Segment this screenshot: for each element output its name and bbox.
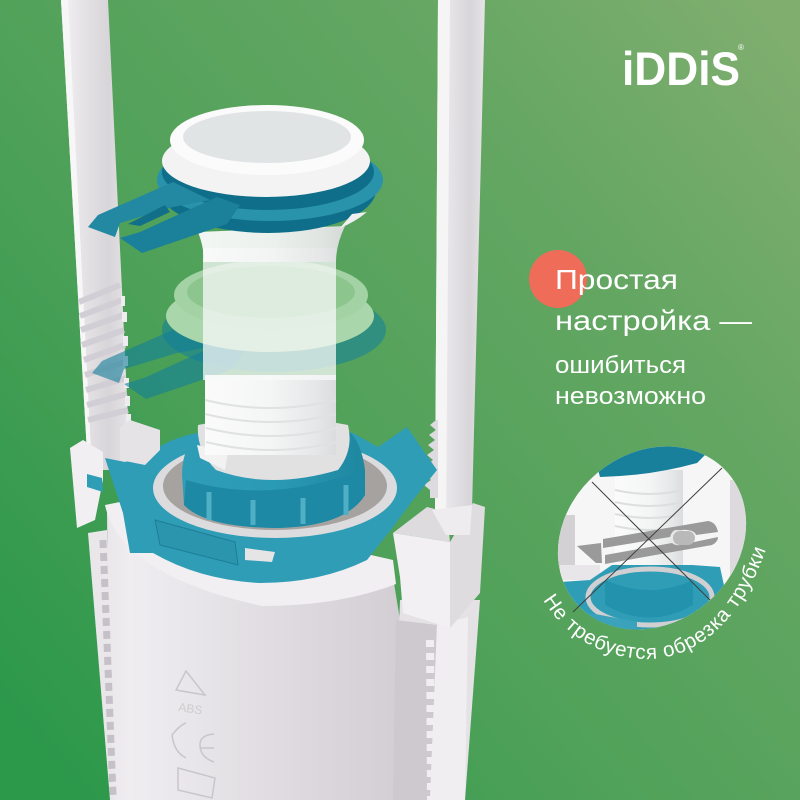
left rod: [61, 0, 131, 470]
logo: ®: [738, 43, 744, 52]
float body: [105, 500, 400, 800]
inset: cross lines: [573, 468, 722, 612]
headline: [555, 264, 752, 336]
embossed markings: [172, 671, 215, 798]
lower tube: [205, 375, 336, 455]
inset top flange: [598, 446, 705, 477]
ghost rim: [166, 260, 374, 352]
lever arms: [88, 182, 210, 237]
curved caption: Не требуется обрезка трубки: [544, 547, 766, 660]
teal ring: [160, 147, 376, 233]
ghost flange: lowered position: [92, 260, 386, 399]
rim: [162, 125, 370, 197]
ghost levers: [92, 328, 244, 399]
inset: crossed-out utility knife: [577, 521, 718, 564]
ghost ring: [162, 288, 386, 372]
red accent circle: [529, 250, 587, 308]
inset base ring: [563, 565, 724, 630]
clear upper tube flare: [198, 226, 345, 262]
subheadline: [555, 352, 706, 410]
top flange with lever: [88, 105, 383, 253]
right clamp: [393, 503, 485, 628]
inset tube: [659, 470, 683, 565]
right rod: [424, 0, 485, 510]
left clamp: [70, 420, 160, 528]
logo: iDDiS: [622, 42, 740, 95]
headline: Простая: [555, 264, 678, 295]
headline: настройка —: [555, 305, 752, 336]
inset: no cutting needed: [558, 446, 746, 630]
subheadline: невозможно: [555, 383, 706, 410]
tube collar inside nut: [197, 418, 350, 480]
blue base ring: [105, 427, 437, 583]
left side strip: [88, 530, 114, 800]
blue threaded nut: [182, 432, 365, 528]
subheadline: ошибиться: [555, 352, 686, 379]
translucent tube section: [203, 248, 336, 380]
float body: ABS: [178, 700, 203, 717]
right side strip: [393, 600, 480, 800]
